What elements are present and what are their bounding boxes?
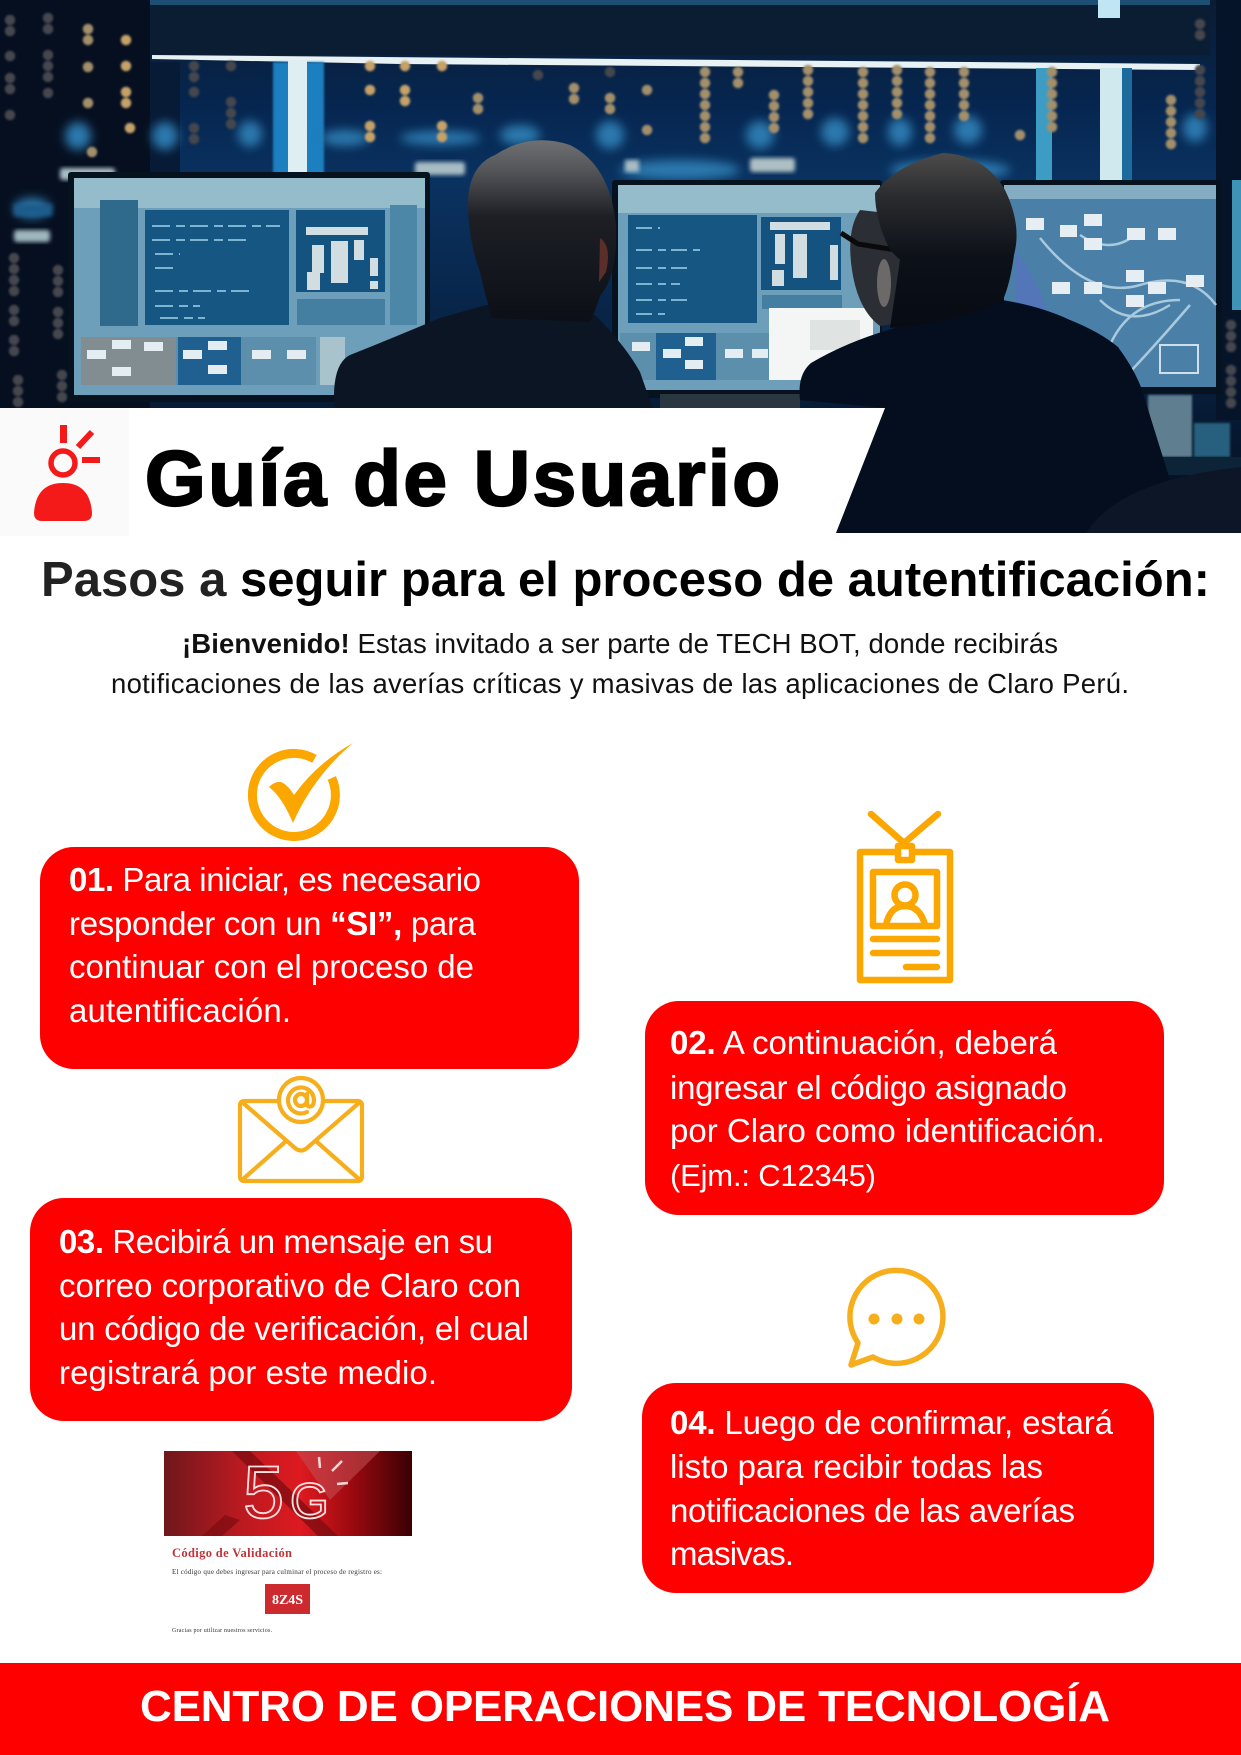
email preview xyxy=(164,1451,412,1634)
intro text: ¡Bienvenido! Estas invitado a ser parte de TECH BOT, donde recibirás xyxy=(182,628,1058,659)
panel: step 04 xyxy=(642,1383,1154,1593)
right person xyxy=(799,153,1178,533)
panel: step 02 xyxy=(645,1001,1164,1215)
right monitor xyxy=(1000,180,1222,394)
email preview: Gracias por utilizar nuestros servicios. xyxy=(172,1628,272,1634)
monitor stand and desk xyxy=(660,394,1241,475)
face and glasses xyxy=(841,210,920,326)
email banner 5G xyxy=(164,1451,412,1536)
footer bar xyxy=(0,1663,1241,1755)
vertical light bars xyxy=(273,60,1241,310)
title band xyxy=(0,408,885,533)
panel: step 02: ingresar el código asignado xyxy=(670,1069,1067,1106)
middle monitor xyxy=(612,180,882,398)
email banner 5G: G xyxy=(290,1473,329,1529)
subtitle: Pasos a seguir para el proceso de autentificación: xyxy=(41,553,1210,607)
chair xyxy=(1086,467,1241,533)
panel: step 03: 03. Recibirá un mensaje en su xyxy=(59,1223,493,1260)
panel: step 01: 01. Para iniciar, es necesario xyxy=(69,861,481,898)
panel: step 01: continuar con el proceso de xyxy=(69,948,474,985)
footer bar: CENTRO DE OPERACIONES DE TECNOLOGÍA xyxy=(140,1681,1110,1731)
panel: step 03: un código de verificación, el cual xyxy=(59,1310,529,1347)
panel: step 03: correo corporativo de Claro con xyxy=(59,1267,521,1304)
title: Guía de Usuario xyxy=(145,434,780,522)
intro text xyxy=(111,628,1129,699)
email preview: El código que debes ingresar para culminar el proceso de registro es: xyxy=(172,1568,382,1576)
panel: step 01: autentificación. xyxy=(69,992,291,1029)
panel: step 01 xyxy=(40,847,579,1069)
icon: envelope xyxy=(240,1078,362,1181)
panel: step 04: masivas. xyxy=(670,1535,794,1572)
email preview: 8Z4S xyxy=(272,1593,303,1608)
panel: step 01: responder con un “SI”, para xyxy=(69,905,477,942)
panel: step 04: 04. Luego de confirmar, estará xyxy=(670,1404,1114,1441)
email banner 5G: 5 xyxy=(243,1451,284,1534)
panel: step 04: listo para recibir todas las xyxy=(670,1448,1043,1485)
blue glows xyxy=(14,114,1207,218)
ceiling beam xyxy=(150,0,1210,70)
icon: id badge xyxy=(860,814,950,980)
server LEDs xyxy=(10,18,1231,410)
panel: step 02: 02. A continuación, deberá xyxy=(670,1024,1058,1061)
left monitor xyxy=(68,172,430,402)
email preview: Código de Validación xyxy=(172,1546,292,1560)
panel: step 04: notificaciones de las averías xyxy=(670,1492,1075,1529)
icon: check mark xyxy=(252,743,353,836)
logo icon xyxy=(0,408,129,536)
left person xyxy=(334,140,655,415)
panel: step 02: por Claro como identificación. xyxy=(670,1112,1105,1149)
panel: step 02: (Ejm.: C12345) xyxy=(670,1158,876,1193)
photo: operators in front of monitors xyxy=(0,0,1241,533)
panel: step 03 xyxy=(30,1198,572,1421)
icon: chat bubble xyxy=(850,1270,943,1365)
intro text: notificaciones de las averías críticas y masivas de las aplicaciones de Claro Perú. xyxy=(111,668,1129,699)
panel: step 03: registrará por este medio. xyxy=(59,1354,437,1391)
